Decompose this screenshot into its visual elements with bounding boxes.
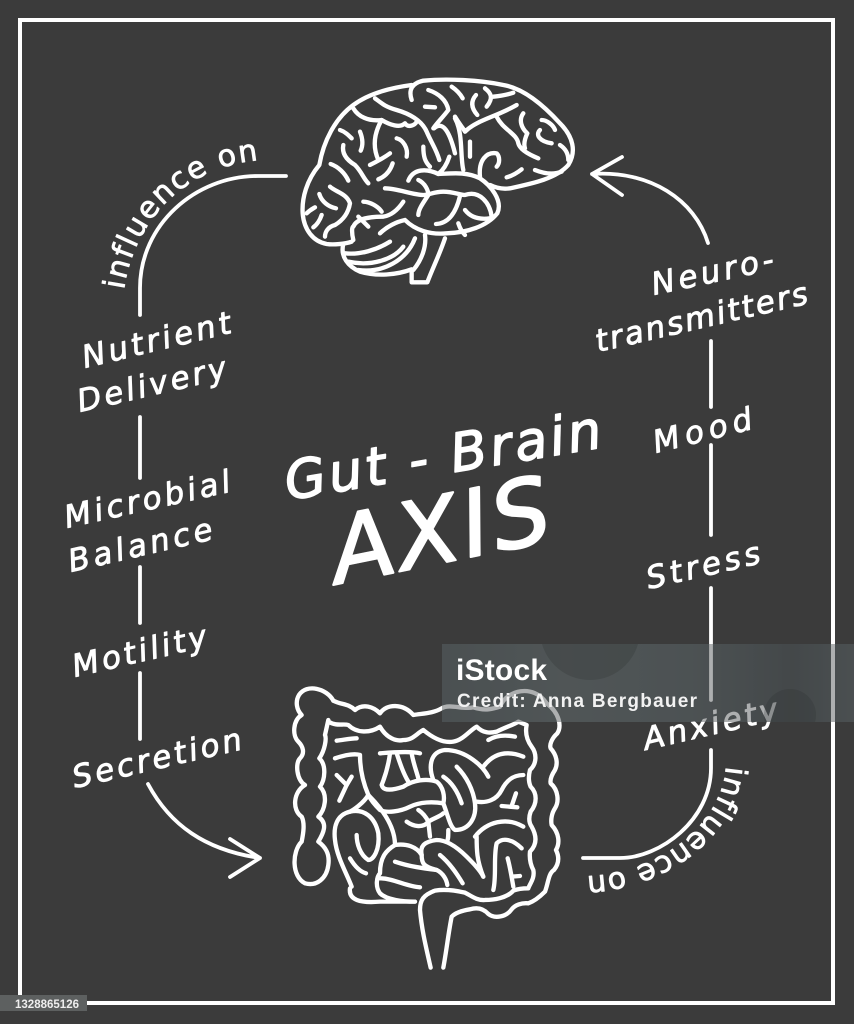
label: Neuro-: Neuro-	[648, 242, 777, 303]
label: Mood: Mood	[649, 401, 756, 461]
image id tag: 1328865126	[15, 999, 79, 1011]
connector lines: right side	[709, 341, 713, 700]
connector lines: left side	[138, 417, 142, 739]
arrow: into brain	[592, 157, 708, 243]
curved label: influence on (right): influence on	[588, 768, 749, 893]
label: Nutrient: Nutrient	[78, 305, 236, 376]
label: transmitters: transmitters	[592, 276, 811, 360]
label: Anxiety: Anxiety	[638, 692, 782, 758]
arrow: into gut	[148, 784, 260, 877]
label: Stress: Stress	[643, 536, 764, 597]
image id tag	[0, 995, 87, 1011]
label: Microbial: Microbial	[61, 464, 234, 536]
watermark overlay	[442, 644, 854, 722]
watermark brand: iStock	[456, 654, 547, 687]
label: Motility: Motility	[69, 619, 211, 685]
label: Delivery: Delivery	[74, 350, 231, 420]
icon: brain	[303, 80, 573, 282]
label: Balance: Balance	[65, 512, 216, 580]
title: AXIS: AXIS	[316, 456, 560, 607]
label: Secretion: Secretion	[69, 722, 245, 796]
title: Gut - Brain: Gut - Brain	[280, 400, 606, 513]
watermark credit: Credit: Anna Bergbauer	[457, 691, 698, 712]
watermark band underlay	[442, 644, 854, 722]
icon: intestines	[294, 688, 559, 968]
arrow: left arc from brain	[140, 176, 286, 315]
arrow: right arc from gut	[583, 750, 711, 858]
curved label: influence on (left): influence on	[102, 144, 256, 288]
